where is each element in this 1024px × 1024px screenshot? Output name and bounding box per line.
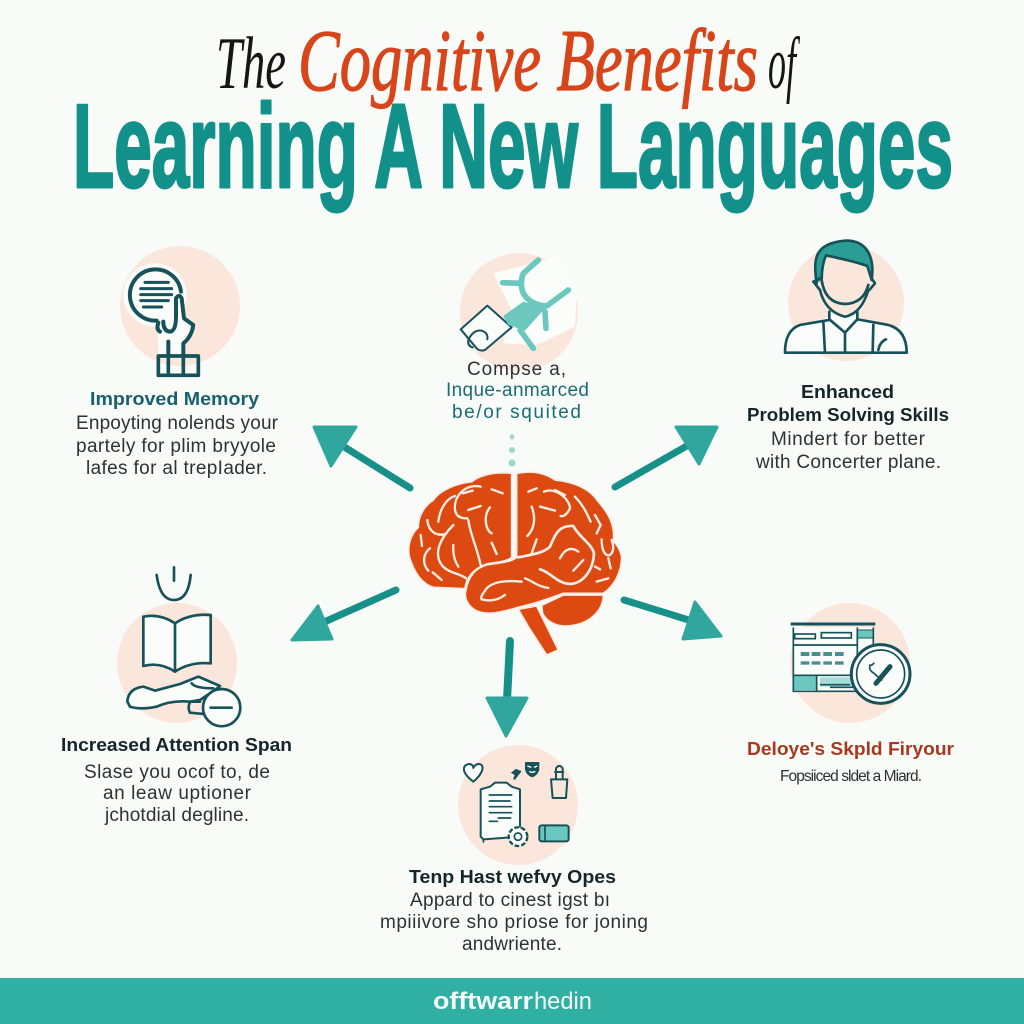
arrow: to top left	[314, 427, 410, 488]
description: bottom item: mpiiivore sho priose for joning	[380, 912, 648, 933]
arrow: to lower left	[292, 590, 396, 640]
footer brand text	[433, 988, 592, 1015]
icon: branching figure	[460, 253, 578, 371]
description: improved memory: partely for plim bryyole	[76, 436, 276, 457]
heading: bottom item: Tenp Hast wefvy Opes	[409, 867, 616, 887]
arrow: to lower right	[624, 600, 721, 639]
icon: open book and hand	[117, 567, 240, 726]
description: center top	[446, 359, 589, 423]
description: bottom item: andwriente.	[462, 934, 562, 955]
heading: improved memory: Improved Memory	[90, 389, 259, 409]
panel: bottom item	[380, 745, 648, 955]
arrow: to top right	[615, 427, 717, 487]
description: bottom item	[380, 890, 648, 955]
icon: document cluster	[458, 745, 578, 865]
description: improved memory: lafes for al trepIader.	[86, 458, 267, 479]
title line 1: of	[768, 23, 801, 105]
description: attention span: jchotdial degline.	[104, 805, 249, 826]
panel: enhanced problem solving skills	[747, 241, 949, 473]
panel: skill focus	[747, 603, 954, 785]
footer brand text: hedin	[534, 988, 592, 1015]
icon: dashboard with magnifier	[790, 603, 910, 723]
heading: increased attention span: Increased Attention Span	[61, 735, 292, 755]
arrow: downward	[487, 641, 527, 736]
title	[73, 13, 953, 213]
central brain illustration	[409, 472, 622, 655]
description: improved memory	[76, 413, 279, 479]
icon: hand holding speech bubble	[120, 246, 240, 375]
panel: center top item	[446, 253, 589, 466]
heading: enhanced problem solving skills	[747, 382, 949, 425]
description: problem solving: with Concerter plane.	[755, 452, 941, 473]
footer bar	[0, 978, 1024, 1024]
description: attention span: an leaw uptioner	[103, 783, 252, 804]
description: problem solving	[755, 429, 941, 473]
description: skill focus: Fopsiiced sldet a Miard.	[780, 768, 922, 785]
description: attention span	[84, 762, 270, 826]
description: bottom item: Appard to cinest igst bı	[410, 890, 610, 911]
heading: enhanced problem solving skills: Enhanced	[801, 382, 894, 402]
description: attention span: Slase you ocof to, de	[84, 762, 270, 783]
description: center top: Inque-anmarced	[446, 380, 589, 401]
connector dots	[508, 434, 516, 466]
description: center top: Compse a,	[467, 359, 566, 380]
description: improved memory: Enpoyting nolends your	[76, 413, 279, 434]
panel: improved memory	[76, 246, 279, 479]
heading: skill focus: Deloye's Skpld Firyour	[747, 739, 954, 759]
panel: increased attention span	[61, 567, 292, 826]
title line 1: The	[216, 23, 286, 105]
description: center top: be/or squited	[452, 402, 581, 423]
footer brand text: offtwarr	[433, 988, 533, 1015]
title line 1	[216, 13, 801, 110]
title line 1: Cognitive Benefits	[298, 13, 758, 110]
icon: man portrait	[785, 241, 907, 361]
heading: enhanced problem solving skills: Problem Solving Skills	[747, 405, 949, 425]
description: problem solving: Mindert for better	[771, 429, 926, 450]
